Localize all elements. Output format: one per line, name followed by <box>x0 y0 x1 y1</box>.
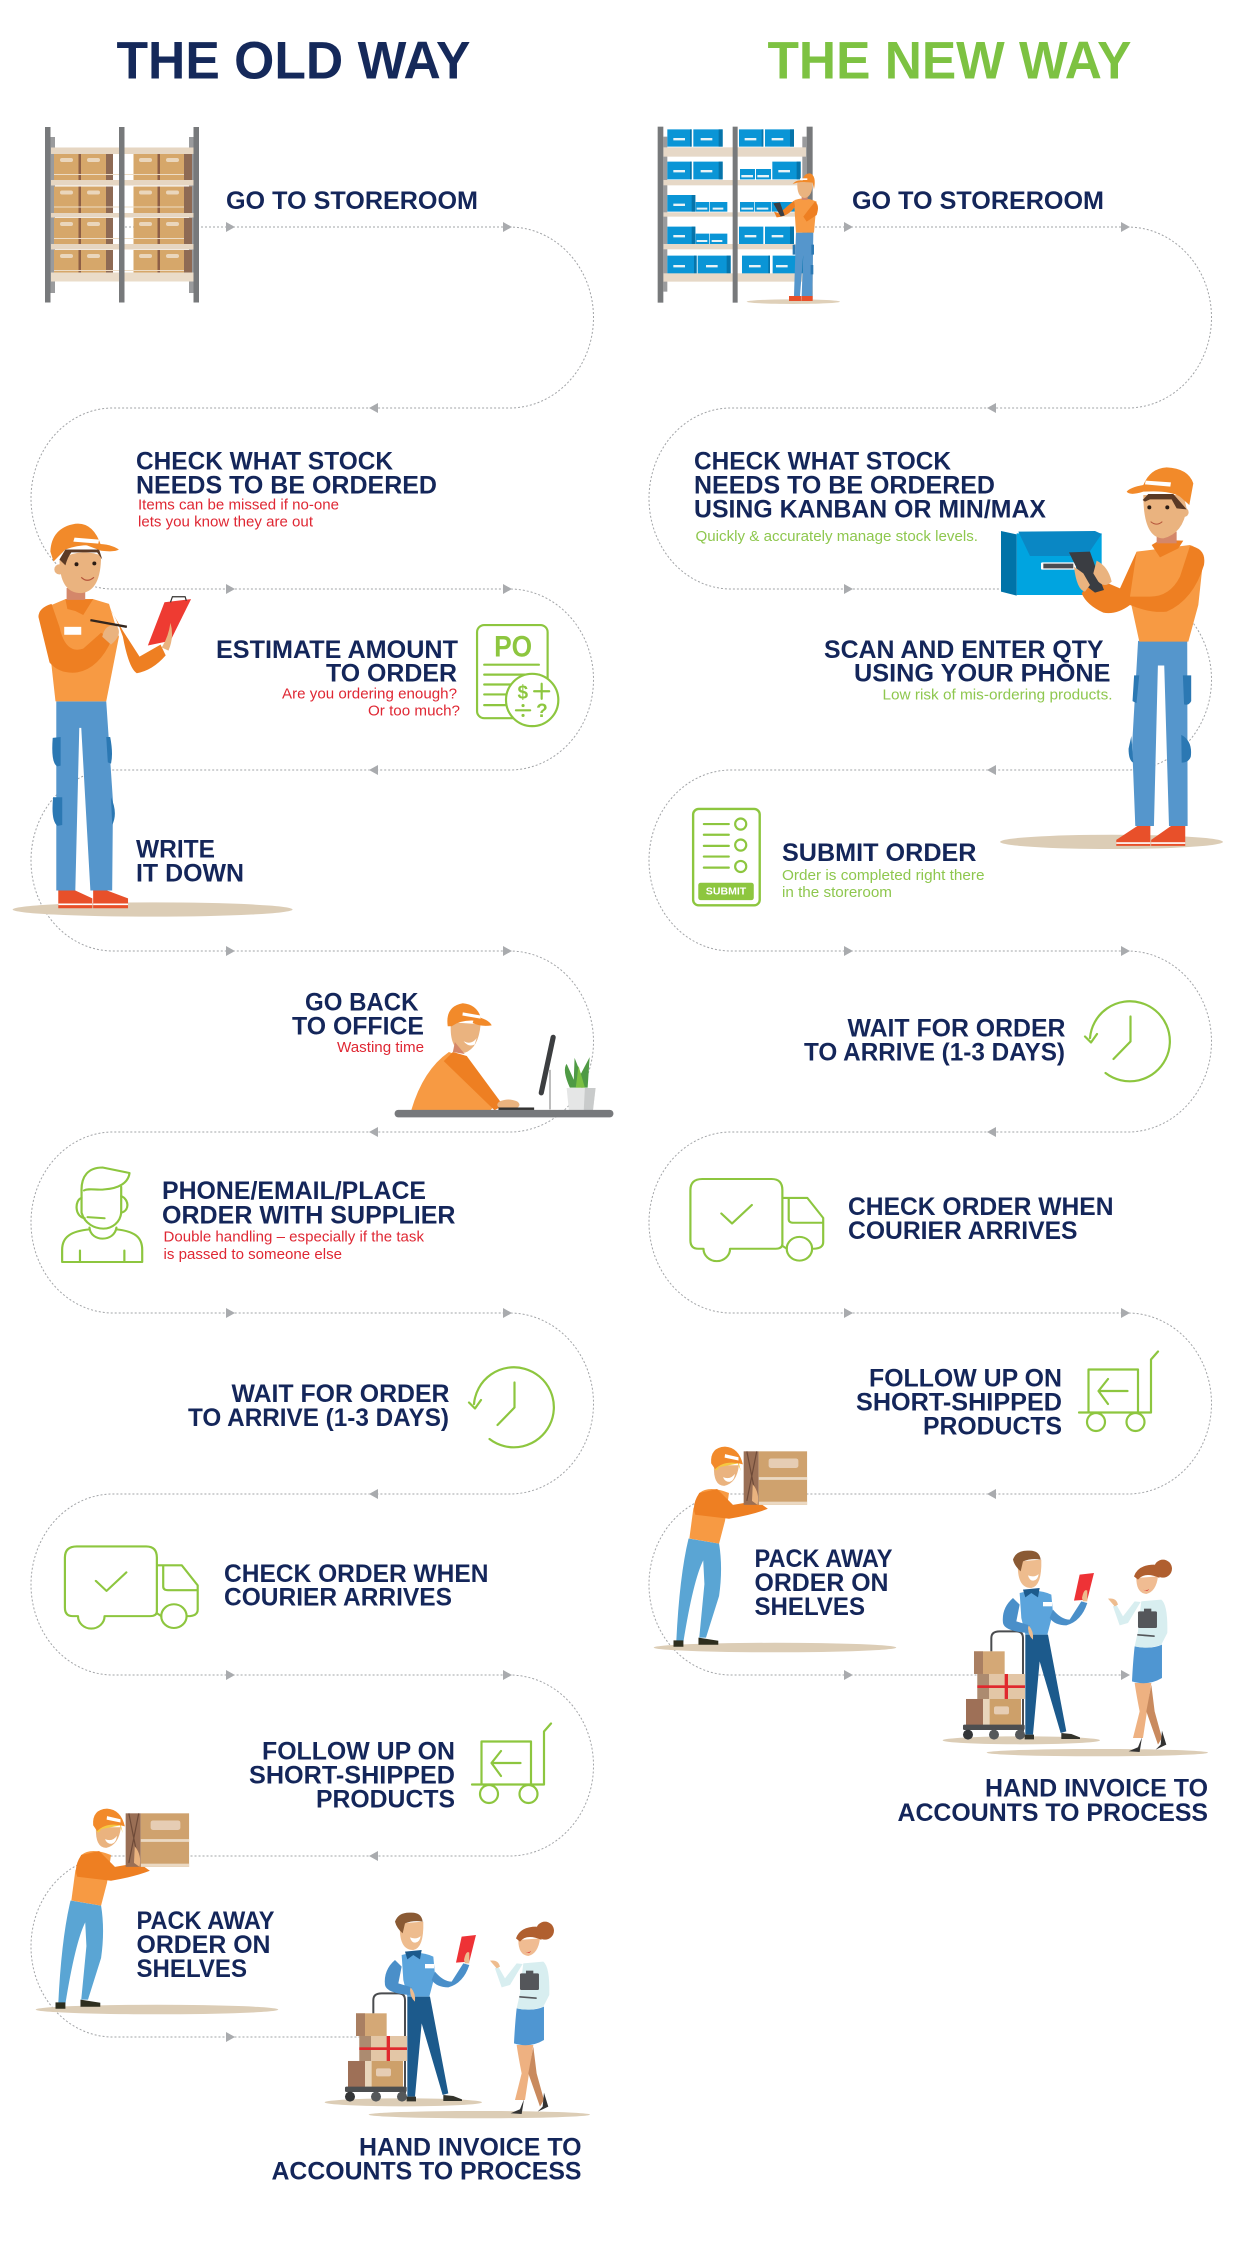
step: check what stock (old): NEEDS TO BE ORDERED <box>136 471 437 499</box>
step: hand invoice to accounts (old): ACCOUNTS TO PROCESS <box>272 2157 582 2185</box>
illustration: worker with clipboard (old) <box>13 524 293 917</box>
step: check order when courier arrives (old): CHECK ORDER WHEN <box>224 1560 488 1588</box>
step: check what stock using kanban (new): NEEDS TO BE ORDERED <box>694 471 995 499</box>
step: pack away (new): ORDER ON <box>754 1569 888 1597</box>
illustration: worker carrying box (new) <box>654 1447 896 1652</box>
old way dotted route <box>31 222 594 2042</box>
step: wait for order (old): TO ARRIVE (1-3 DAYS) <box>188 1404 449 1432</box>
icon: purchase order with calculator <box>477 625 558 726</box>
step: submit order: SUBMIT ORDER <box>782 839 976 867</box>
step: write it down <box>136 835 244 887</box>
step: submit order: Order is completed right there <box>782 867 984 884</box>
step: hand invoice to accounts (new): HAND INVOICE TO <box>985 1774 1208 1802</box>
step: follow up on short-shipped (new) <box>856 1364 1062 1440</box>
step: go back to office: GO BACK <box>305 988 418 1016</box>
title: the old way: THE OLD WAY <box>116 32 470 90</box>
icon: purchase order with calculator: ? <box>536 701 548 722</box>
step: check what stock using kanban (new): CHECK WHAT STOCK <box>694 447 951 475</box>
illustration: clerk with trolley and accountant (old) <box>325 1913 590 2118</box>
step: estimate amount to order: TO ORDER <box>326 659 457 687</box>
step: follow up on short-shipped (old): FOLLOW UP ON <box>262 1737 455 1765</box>
illustration: worker at office desk <box>395 1003 613 1117</box>
illustration: storeroom shelves with cardboard boxes <box>45 127 199 302</box>
step: follow up on short-shipped (old): PRODUCTS <box>316 1785 455 1813</box>
step: check what stock using kanban (new) <box>694 447 1046 545</box>
step: check order when courier arrives (new): COURIER ARRIVES <box>848 1217 1078 1245</box>
step: check what stock (old) <box>136 447 437 530</box>
step: check what stock (old): Items can be missed if no-one <box>138 496 339 513</box>
icon: delivery truck (old) <box>65 1546 198 1629</box>
step: write it down: IT DOWN <box>136 859 244 887</box>
step: wait for order (new): WAIT FOR ORDER <box>848 1014 1066 1042</box>
step: submit order: in the storeroom <box>782 884 892 901</box>
icon: submit form <box>693 809 760 905</box>
step: hand invoice to accounts (old): HAND INVOICE TO <box>359 2133 582 2161</box>
step: hand invoice to accounts (new): ACCOUNTS TO PROCESS <box>898 1799 1208 1827</box>
step: pack away (old) <box>136 1907 275 1983</box>
step: wait for order (new): TO ARRIVE (1-3 DAYS) <box>804 1038 1065 1066</box>
icon: delivery truck (new) <box>690 1179 823 1261</box>
icon: hand cart with return arrow (old) <box>472 1724 551 1803</box>
title: the new way: THE NEW WAY <box>768 32 1132 90</box>
illustration: worker scanning blue bin (new) <box>1000 467 1223 849</box>
step: write it down: WRITE <box>136 835 215 863</box>
step: phone/email/place order <box>162 1177 456 1263</box>
step: follow up on short-shipped (new): FOLLOW UP ON <box>869 1364 1062 1392</box>
illustration: clerk with trolley and accountant (new) <box>943 1551 1208 1756</box>
step: scan and enter qty: SCAN AND ENTER QTY <box>824 636 1104 664</box>
step: hand invoice to accounts (new) <box>898 1774 1208 1827</box>
step: follow up on short-shipped (old) <box>249 1737 455 1813</box>
step: go to storeroom (new): GO TO STOREROOM <box>852 187 1104 215</box>
small worker with tablet <box>747 173 840 304</box>
step: check what stock using kanban (new): Quickly & accurately manage stock levels. <box>696 528 978 545</box>
step: check order when courier arrives (old) <box>224 1560 488 1611</box>
step: scan and enter qty: USING YOUR PHONE <box>854 659 1110 687</box>
step: go back to office: Wasting time <box>337 1039 424 1056</box>
illustration: shelves with blue kanban bins and worker <box>658 127 840 304</box>
step: pack away (old): ORDER ON <box>136 1931 270 1959</box>
step: check what stock (old): CHECK WHAT STOCK <box>136 447 393 475</box>
step: phone/email/place order: PHONE/EMAIL/PLACE <box>162 1177 426 1205</box>
icon: clock (new) <box>1085 1001 1170 1081</box>
icon: hand cart with return arrow (new) <box>1079 1352 1158 1431</box>
step: go to storeroom (old): GO TO STOREROOM <box>226 187 478 215</box>
icon: person with headset <box>62 1167 142 1262</box>
step: go back to office <box>292 988 424 1056</box>
step: go back to office: TO OFFICE <box>292 1012 424 1040</box>
step: estimate amount to order: ESTIMATE AMOUNT <box>216 636 458 664</box>
step: follow up on short-shipped (new): SHORT-SHIPPED <box>856 1388 1062 1416</box>
step: wait for order (new) <box>804 1014 1066 1066</box>
step: phone/email/place order: ORDER WITH SUPPLIER <box>162 1201 456 1229</box>
step: pack away (old): PACK AWAY <box>136 1907 275 1935</box>
new way dotted route <box>649 222 1212 1680</box>
step: wait for order (old) <box>188 1380 450 1432</box>
step: check order when courier arrives (new) <box>848 1193 1114 1245</box>
step: check what stock using kanban (new): USING KANBAN OR MIN/MAX <box>694 495 1046 523</box>
step: estimate amount to order <box>216 636 460 719</box>
step: pack away (new): PACK AWAY <box>754 1545 893 1573</box>
icon: submit form: SUBMIT <box>706 887 747 898</box>
step: phone/email/place order: is passed to someone else <box>164 1246 342 1263</box>
step: wait for order (old): WAIT FOR ORDER <box>232 1380 450 1408</box>
step: scan and enter qty <box>824 636 1112 703</box>
step: pack away (new): SHELVES <box>754 1593 865 1621</box>
step: check order when courier arrives (old): COURIER ARRIVES <box>224 1583 452 1611</box>
illustration: worker carrying box (old) <box>36 1809 278 2014</box>
step: check order when courier arrives (new): CHECK ORDER WHEN <box>848 1193 1114 1221</box>
icon: purchase order with calculator: $ <box>517 682 528 703</box>
step: estimate amount to order: Or too much? <box>368 702 460 719</box>
step: phone/email/place order: Double handling – especially if the task <box>164 1228 424 1245</box>
step: hand invoice to accounts (old) <box>272 2133 582 2185</box>
step: estimate amount to order: Are you ordering enough? <box>282 685 457 702</box>
step: pack away (new) <box>754 1545 893 1621</box>
step: follow up on short-shipped (new): PRODUCTS <box>923 1412 1062 1440</box>
step: submit order <box>782 839 984 901</box>
step: check what stock (old): lets you know they are out <box>138 513 314 530</box>
icon: purchase order with calculator: PO <box>494 630 532 663</box>
step: pack away (old): SHELVES <box>136 1955 247 1983</box>
step: scan and enter qty: Low risk of mis-ordering products. <box>882 686 1112 703</box>
icon: clock (old) <box>469 1367 554 1447</box>
step: follow up on short-shipped (old): SHORT-SHIPPED <box>249 1761 455 1789</box>
